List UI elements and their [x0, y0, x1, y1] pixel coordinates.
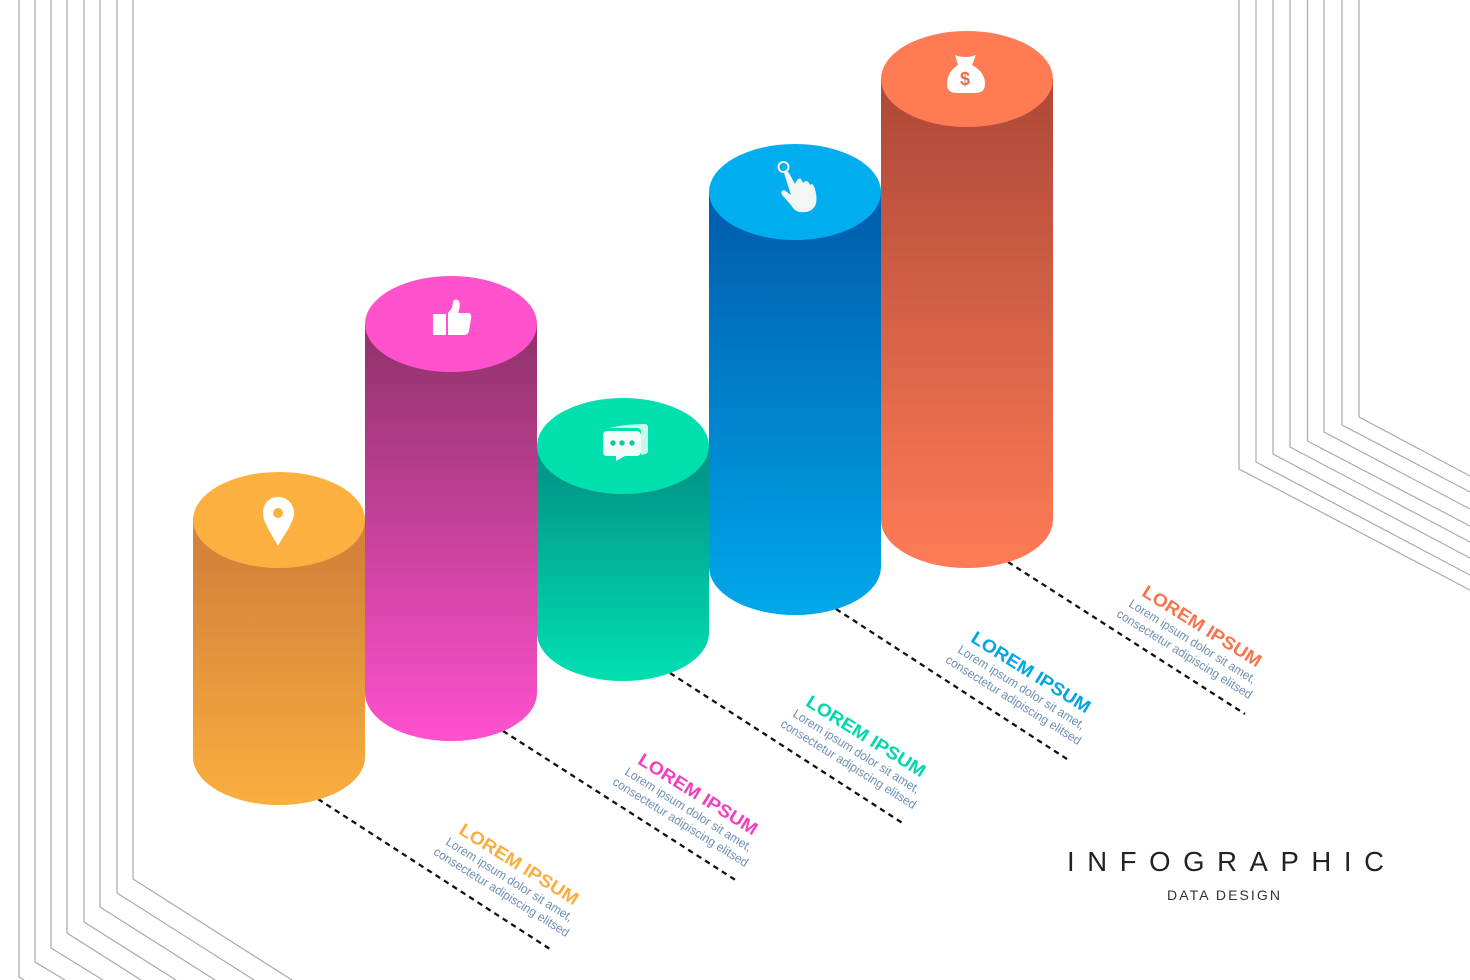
dashed leader line 5: [1008, 562, 1245, 714]
cylinder 4: blue: [709, 144, 881, 615]
text block 2: [610, 744, 770, 870]
right background line pattern: [1239, 0, 1470, 590]
text block 1: [431, 814, 591, 940]
text block 4: [943, 622, 1103, 748]
icon: pointing hand: [778, 162, 816, 212]
text block 1: LOREM IPSUM: [456, 819, 582, 909]
icon: chat bubbles: [603, 424, 648, 461]
cylinder 1: amber: [193, 472, 365, 805]
text block 1: consectetur adipiscing elitsed: [431, 845, 572, 940]
text block 4: LOREM IPSUM: [968, 627, 1094, 717]
dashed leader line 1: [318, 799, 553, 951]
text block 3: [778, 686, 938, 812]
cylinder 2: magenta: [365, 276, 537, 741]
text block 3: consectetur adipiscing elitsed: [778, 717, 919, 812]
dashed leader line 3: [670, 673, 904, 824]
text block 5: consectetur adipiscing elitsed: [1114, 607, 1255, 702]
text block 4: consectetur adipiscing elitsed: [943, 653, 1084, 748]
text block 5: LOREM IPSUM: [1139, 581, 1265, 671]
cylinder 5: orange: [881, 31, 1053, 568]
title: INFOGRAPHIC: [1067, 846, 1384, 877]
text block 3: LOREM IPSUM: [803, 691, 929, 781]
subtitle: DATA DESIGN: [1167, 887, 1280, 903]
dashed leader line 2: [503, 731, 737, 881]
text block 5: Lorem ipsum dolor sit amet,: [1126, 597, 1258, 686]
left background line pattern: [19, 0, 292, 980]
icon: thumbs up: [433, 300, 471, 335]
dashed leader line 4: [836, 609, 1070, 761]
cylinder 3: green: [537, 398, 709, 681]
text block 2: consectetur adipiscing elitsed: [610, 775, 751, 870]
icon: money bag: $: [960, 69, 970, 89]
text block 4: Lorem ipsum dolor sit amet,: [955, 643, 1087, 732]
text block 2: Lorem ipsum dolor sit amet,: [622, 765, 754, 854]
icon: money bag: [947, 55, 985, 93]
icon: location pin: [263, 497, 294, 546]
text block 5: [1114, 576, 1274, 702]
text block 3: Lorem ipsum dolor sit amet,: [790, 707, 922, 796]
text block 2: LOREM IPSUM: [635, 749, 761, 839]
text block 1: Lorem ipsum dolor sit amet,: [443, 835, 575, 924]
